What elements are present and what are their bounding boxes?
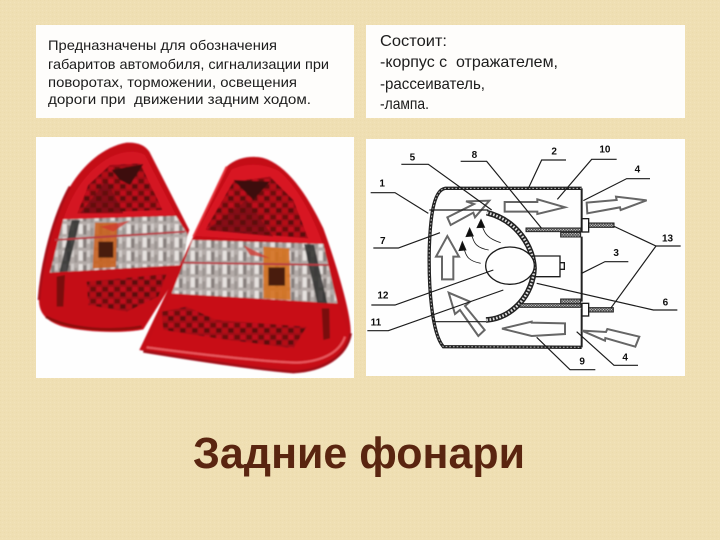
part numbers: 5 xyxy=(410,153,416,164)
panel: lamp diagram xyxy=(366,139,685,376)
text block: composition list: -рассеиватель, xyxy=(380,76,485,93)
text block: purpose xyxy=(48,37,329,107)
part numbers: 12 xyxy=(377,290,389,301)
bolts xyxy=(582,219,614,316)
part numbers: 2 xyxy=(551,147,557,158)
panel: purpose text xyxy=(36,25,354,118)
text block: purpose: дороги при движении задним ходом. xyxy=(48,91,311,107)
reflector xyxy=(486,213,581,320)
leader lines xyxy=(367,159,681,370)
text block: purpose: поворотах, торможении, освещения xyxy=(48,74,297,90)
part numbers: 11 xyxy=(371,317,382,328)
title: Задние фонари xyxy=(193,429,525,478)
text block: composition list: -корпус с отражателем, xyxy=(380,54,558,71)
part numbers xyxy=(371,145,674,367)
part numbers: 4 xyxy=(635,165,641,176)
panel: tail lights photo xyxy=(36,137,354,378)
text block: composition list: Состоит: xyxy=(380,33,447,50)
part numbers: 3 xyxy=(613,248,619,259)
bulb base xyxy=(534,256,564,277)
part numbers: 4 xyxy=(622,353,628,364)
part numbers: 7 xyxy=(380,236,386,247)
part numbers: 10 xyxy=(599,145,611,156)
part numbers: 1 xyxy=(379,179,385,190)
text block: purpose: Предназначены для обозначения xyxy=(48,37,277,53)
text block: composition list xyxy=(380,33,558,113)
heat flow arrows xyxy=(459,219,501,263)
part numbers: 6 xyxy=(663,297,669,308)
left lamp xyxy=(39,143,189,332)
bulb xyxy=(486,247,534,284)
text block: purpose: габаритов автомобиля, сигнализации при xyxy=(48,56,329,72)
panel: composition text xyxy=(366,25,685,118)
part numbers: 9 xyxy=(579,356,585,367)
lamp housing xyxy=(429,188,582,347)
text block: composition list: -лампа. xyxy=(380,96,429,113)
part numbers: 13 xyxy=(662,233,674,244)
part numbers: 8 xyxy=(472,150,478,161)
air flow arrows xyxy=(436,197,647,347)
right lamp xyxy=(139,157,351,372)
